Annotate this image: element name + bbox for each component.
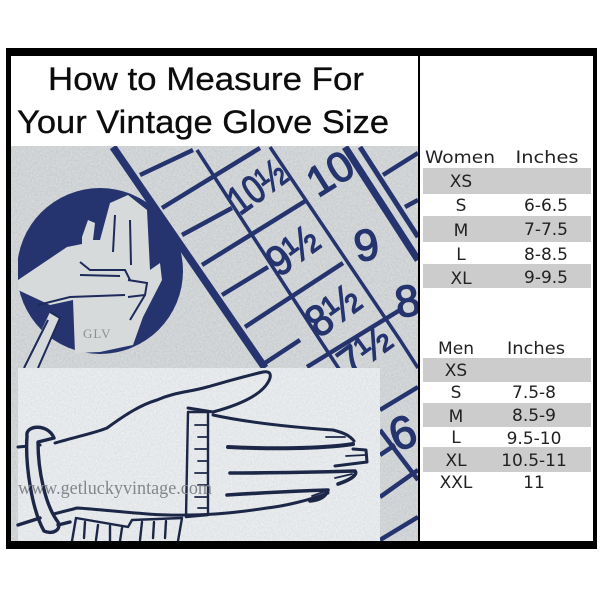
chart: half-size numbers: 9½ [257,216,328,285]
size labels: men: XXL [440,473,473,493]
table: men's sizes [423,339,591,493]
chart: whole-size numbers: 6 [382,404,423,461]
chart: half-size numbers [228,160,395,368]
table: women's sizes [423,148,591,289]
row stripes: men [423,358,591,472]
inch values: men: 8.5-9 [512,406,556,426]
size labels: women: XL [450,269,472,289]
watermark: GLV: GLV [83,326,112,341]
watermark: website: www.getluckyvintage.com [18,478,212,499]
inch values: men: 10.5-11 [501,451,567,471]
illustration: vintage glove measuring chart [11,141,424,541]
size labels: men [440,361,473,493]
size labels: women: L [456,245,466,265]
title: How to Measure For [48,61,364,97]
chart: half-size numbers: 8½ [296,275,370,347]
column headers: women: Inches [516,148,579,168]
inch values: women: 9-9.5 [524,268,568,288]
column headers: men: Inches [507,339,565,359]
outline: hand [18,372,367,541]
panel: glove hand illustration [18,368,380,541]
icon: measuring hand in navy circle [17,188,183,368]
chart: size ruler lines [113,147,418,540]
chart: whole-size numbers: 10 [298,141,362,206]
chart: whole-size numbers [308,152,418,450]
size labels: men: L [451,428,461,448]
size labels: men: XS [445,361,467,381]
size labels: men: M [449,407,463,427]
column headers: women [425,148,579,168]
inch values: men: 7.5-8 [512,383,556,403]
chart: half-size numbers: 7½ [329,317,400,385]
size labels: women: XS [450,172,472,192]
inch values: women: 7-7.5 [524,220,568,240]
inch values: men: 9.5-10 [507,429,561,449]
size labels: men: XL [445,451,467,471]
inch values: women: 8-8.5 [524,245,568,265]
column headers: men [438,339,565,359]
inch values: men: 11 [523,473,545,493]
size labels: men: S [451,383,461,403]
size labels: women: S [456,196,466,216]
row stripes: women [423,168,591,288]
chart: whole-size numbers: 9 [350,219,383,272]
inch values: women [524,196,568,288]
inch values: women: 6-6.5 [524,196,568,216]
chart: whole-size numbers: 8 [391,275,424,328]
column headers: men: Men [438,339,474,359]
column headers: women: Women [425,148,495,168]
size labels: women [450,172,472,289]
title [17,61,389,140]
chart: half-size numbers: 10½ [219,151,295,223]
title: Your Vintage Glove Size [17,104,389,140]
inch values: men [501,383,567,493]
size labels: women: M [454,221,468,241]
